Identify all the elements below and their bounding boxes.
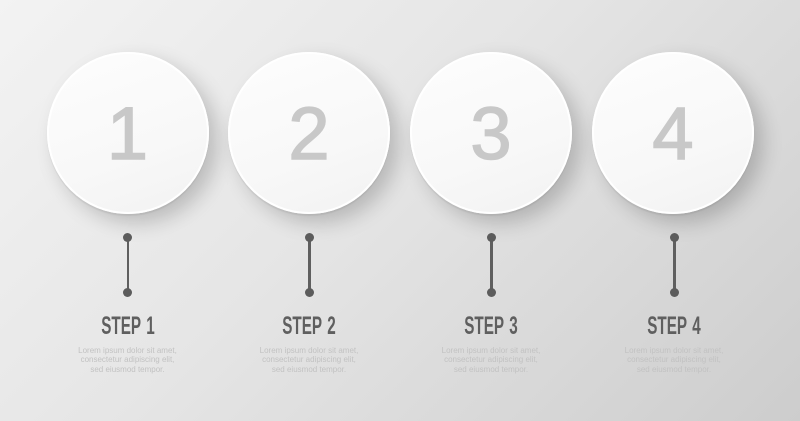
text: step 2: consectetur adipiscing elit, (262, 355, 356, 364)
text: step 1 (78, 346, 177, 374)
circle: step 3: 3 (470, 92, 512, 175)
circle: step 2: 2 (288, 92, 330, 175)
bottom dot: step 2 (304, 288, 314, 297)
bottom dot: step 1 (123, 288, 132, 297)
connector: step 3 (490, 238, 492, 293)
heading: step 3: STEP 3 (464, 312, 518, 340)
heading: step 2: STEP 2 (282, 312, 336, 340)
heading: step 1: STEP 1 (101, 312, 154, 340)
circle: step 1 (46, 52, 208, 214)
text: step 2: Lorem ipsum dolor sit amet, (260, 346, 358, 355)
text: step 3: sed eiusmod tempor. (454, 365, 528, 374)
text: step 2: sed eiusmod tempor. (272, 365, 346, 374)
text: step 3: Lorem ipsum dolor sit amet, (442, 346, 540, 355)
text: step 2 (260, 346, 358, 374)
bottom dot: step 4 (670, 288, 678, 297)
connector: step 4 (673, 238, 676, 293)
text: step 4: Lorem ipsum dolor sit amet, (625, 346, 723, 355)
connector: step 2 (308, 238, 310, 293)
text: step 1: consectetur adipiscing elit, (81, 355, 174, 364)
top dot: step 1 (123, 233, 132, 242)
circle: step 4 (592, 52, 754, 214)
text: step 1: sed eiusmod tempor. (90, 365, 165, 374)
text: step 3 (442, 346, 540, 374)
top dot: step 4 (670, 233, 678, 242)
text: step 4 (625, 346, 723, 374)
top dot: step 3 (486, 233, 496, 242)
circle: step 3 (410, 52, 572, 214)
bottom dot: step 3 (486, 288, 496, 297)
text: step 4: consectetur adipiscing elit, (627, 355, 721, 364)
text: step 4: sed eiusmod tempor. (637, 365, 711, 374)
top dot: step 2 (304, 233, 314, 242)
text: step 3: consectetur adipiscing elit, (444, 355, 538, 364)
connector: step 1 (126, 238, 129, 293)
circle: step 2 (228, 52, 390, 214)
heading: step 4: STEP 4 (647, 312, 701, 340)
text: step 1: Lorem ipsum dolor sit amet, (78, 346, 177, 355)
circle: step 1: 1 (107, 92, 148, 175)
circle: step 4: 4 (652, 92, 694, 175)
